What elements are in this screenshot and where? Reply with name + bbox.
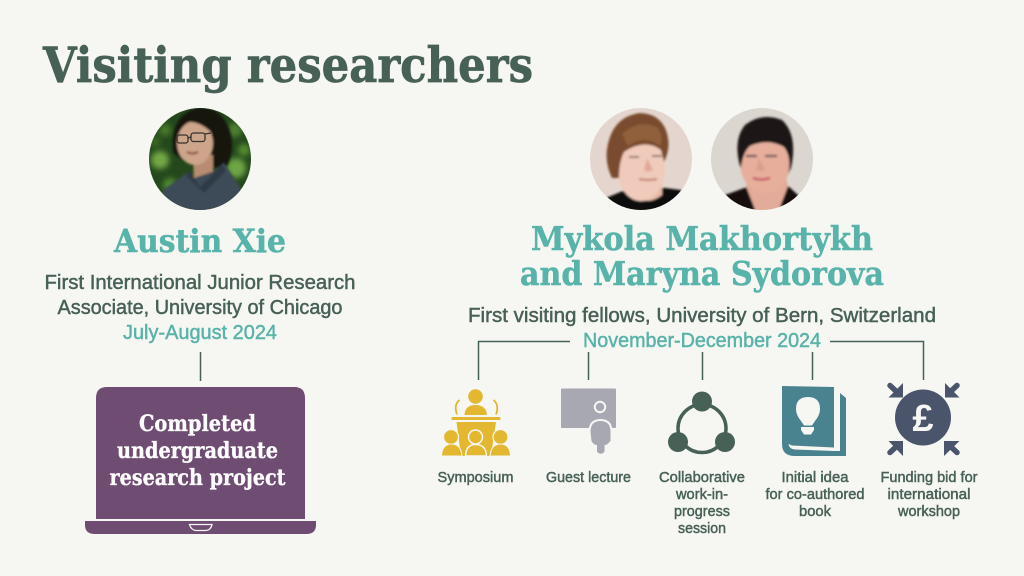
label: book idea: Initial idea (782, 470, 849, 486)
label: collaborative session: Collaborative (659, 470, 745, 486)
heading: Mykola Makhortykh and Maryna Sydorova: Mykola Makhortykh (531, 219, 873, 258)
icon: symposium (442, 389, 510, 456)
date: Austin: July-August 2024 (123, 322, 277, 344)
label: collaborative session (659, 470, 745, 537)
label: book idea: book (799, 504, 832, 520)
label: guest lecture: Guest lecture (546, 470, 631, 486)
laptop text (110, 411, 286, 491)
icon: funding pound (888, 383, 960, 456)
icon: guest lecture (561, 388, 616, 455)
date: fellows: November-December 2024 (583, 330, 821, 352)
label: symposium: Symposium (438, 470, 514, 486)
heading: Mykola Makhortykh and Maryna Sydorova (520, 219, 884, 293)
portrait: Mykola Makhortykh (590, 108, 692, 215)
label: funding bid: workshop (897, 504, 960, 520)
connector: date to laptop (200, 352, 202, 381)
label: funding bid: international (888, 487, 970, 503)
label: collaborative session: work-in- (675, 487, 728, 503)
icon: funding pound: £ (912, 398, 934, 440)
label: book idea: for co-authored (766, 487, 864, 503)
label: book idea (766, 470, 864, 520)
label: collaborative session: progress (674, 504, 730, 520)
text block: Austin role (44, 272, 356, 319)
text block: fellows role: First visiting fellows, University of Bern, Switzerland (468, 305, 936, 327)
icon: collaborative cycle (668, 392, 735, 452)
laptop text: research project (110, 465, 286, 491)
heading: Austin Xie: Austin Xie (113, 222, 286, 260)
laptop text: undergraduate (117, 438, 278, 464)
connector: bracket to activities (478, 342, 924, 380)
label: funding bid: Funding bid for (880, 470, 978, 486)
title: Visiting researchers (42, 36, 533, 94)
portrait: Maryna Sydorova (711, 108, 813, 215)
heading: Mykola Makhortykh and Maryna Sydorova: and Maryna Sydorova (520, 254, 884, 293)
icon: book with lightbulb (782, 386, 846, 456)
text block: Austin role: Associate, University of Chicago (58, 297, 342, 319)
portrait: Austin Xie (149, 108, 251, 215)
icon: laptop with project text (85, 387, 316, 534)
label: funding bid (880, 470, 978, 520)
text block: Austin role: First International Junior Research (44, 272, 356, 294)
glasses (177, 133, 211, 143)
laptop text: Completed (139, 411, 256, 437)
label: collaborative session: session (678, 521, 726, 537)
